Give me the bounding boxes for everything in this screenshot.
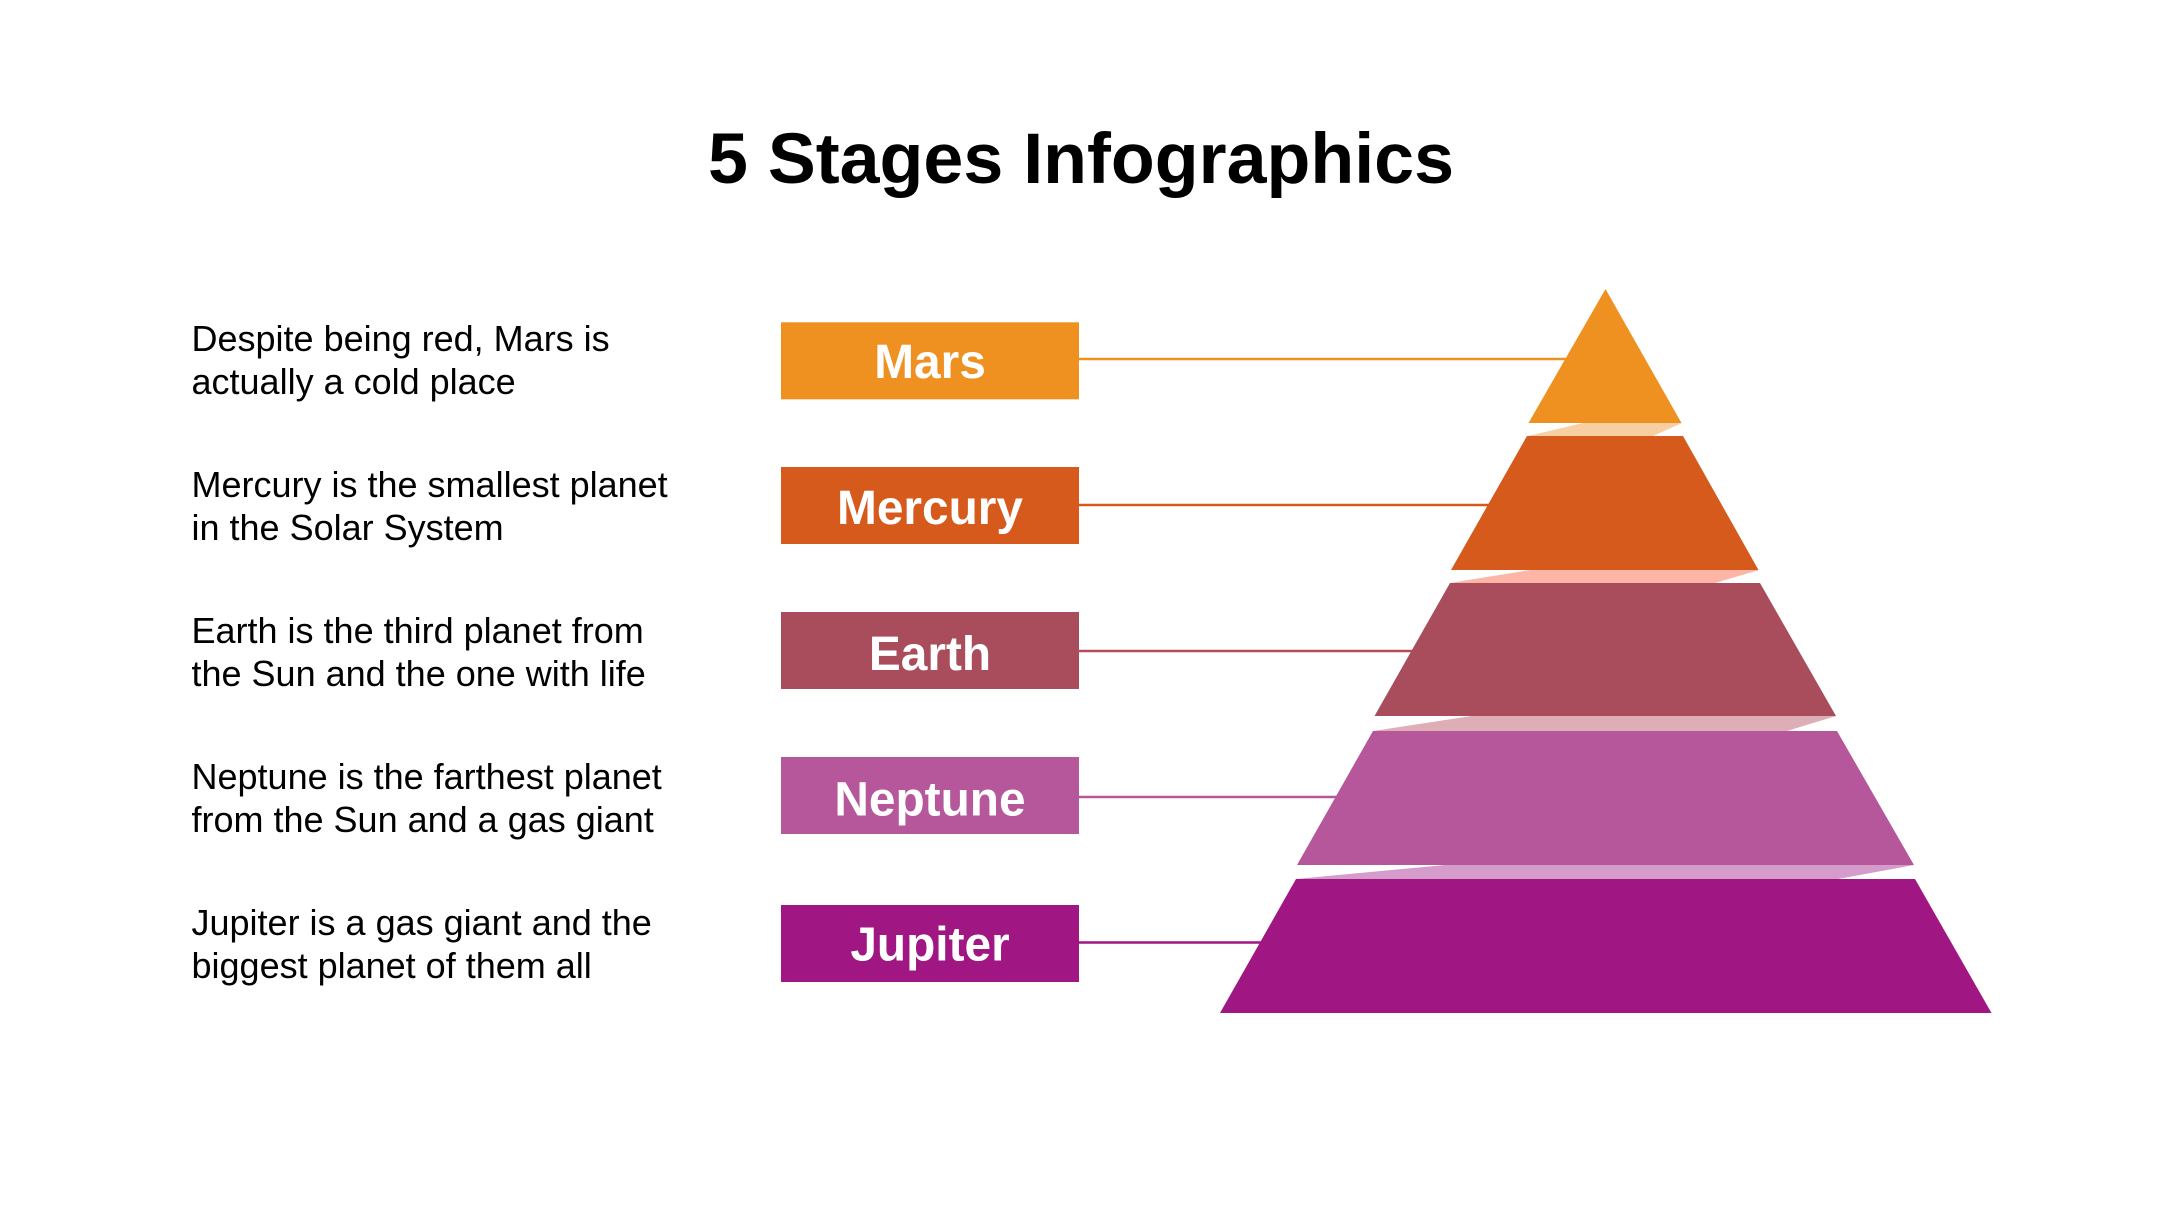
line: Earth — [1079, 650, 1418, 652]
pyramid — [1220, 289, 1992, 1013]
text: Jupiter description: Jupiter is a gas giant and the — [192, 902, 652, 943]
label: Mercury: Mercury — [837, 482, 1023, 535]
text: Mercury description: Mercury is the smallest planet — [192, 464, 668, 505]
line: Jupiter — [1079, 941, 1265, 944]
connector lines — [1079, 359, 1570, 942]
text: Neptune description: from the Sun and a gas giant — [192, 799, 654, 840]
label: Neptune — [781, 757, 1079, 834]
pyramid tier: Jupiter — [1220, 879, 1992, 1013]
title: 5 Stages Infographics — [708, 119, 1454, 199]
text: Mercury description: in the Solar System — [192, 507, 504, 548]
text: Jupiter description: biggest planet of them all — [192, 945, 592, 986]
pyramid tier: Earth — [1374, 583, 1836, 716]
stage descriptions — [192, 318, 668, 986]
line: Neptune — [1079, 796, 1342, 798]
label: Neptune: Neptune — [834, 774, 1026, 826]
pyramid tier: Mars — [1528, 289, 1682, 423]
label: Mercury — [781, 467, 1079, 544]
text: Mars description: Despite being red, Mars is — [192, 318, 610, 359]
label: Mars: Mars — [874, 336, 986, 389]
label: Mars — [781, 322, 1079, 399]
text: Mars description: actually a cold place — [192, 361, 516, 402]
text: Earth description: Earth is the third planet from — [192, 610, 644, 651]
label: Jupiter — [781, 905, 1079, 982]
label: Earth — [781, 612, 1079, 689]
shadow bands — [1296, 423, 1914, 879]
pyramid tier: Neptune — [1297, 731, 1914, 865]
line: Mercury — [1079, 504, 1495, 506]
line: Mars — [1079, 358, 1570, 360]
text: Earth description: the Sun and the one with life — [192, 653, 646, 694]
label: Earth: Earth — [869, 628, 991, 681]
text: Neptune description: Neptune is the farthest planet — [192, 756, 662, 797]
pyramid tier: Mercury — [1451, 436, 1758, 570]
label: Jupiter: Jupiter — [850, 918, 1010, 972]
